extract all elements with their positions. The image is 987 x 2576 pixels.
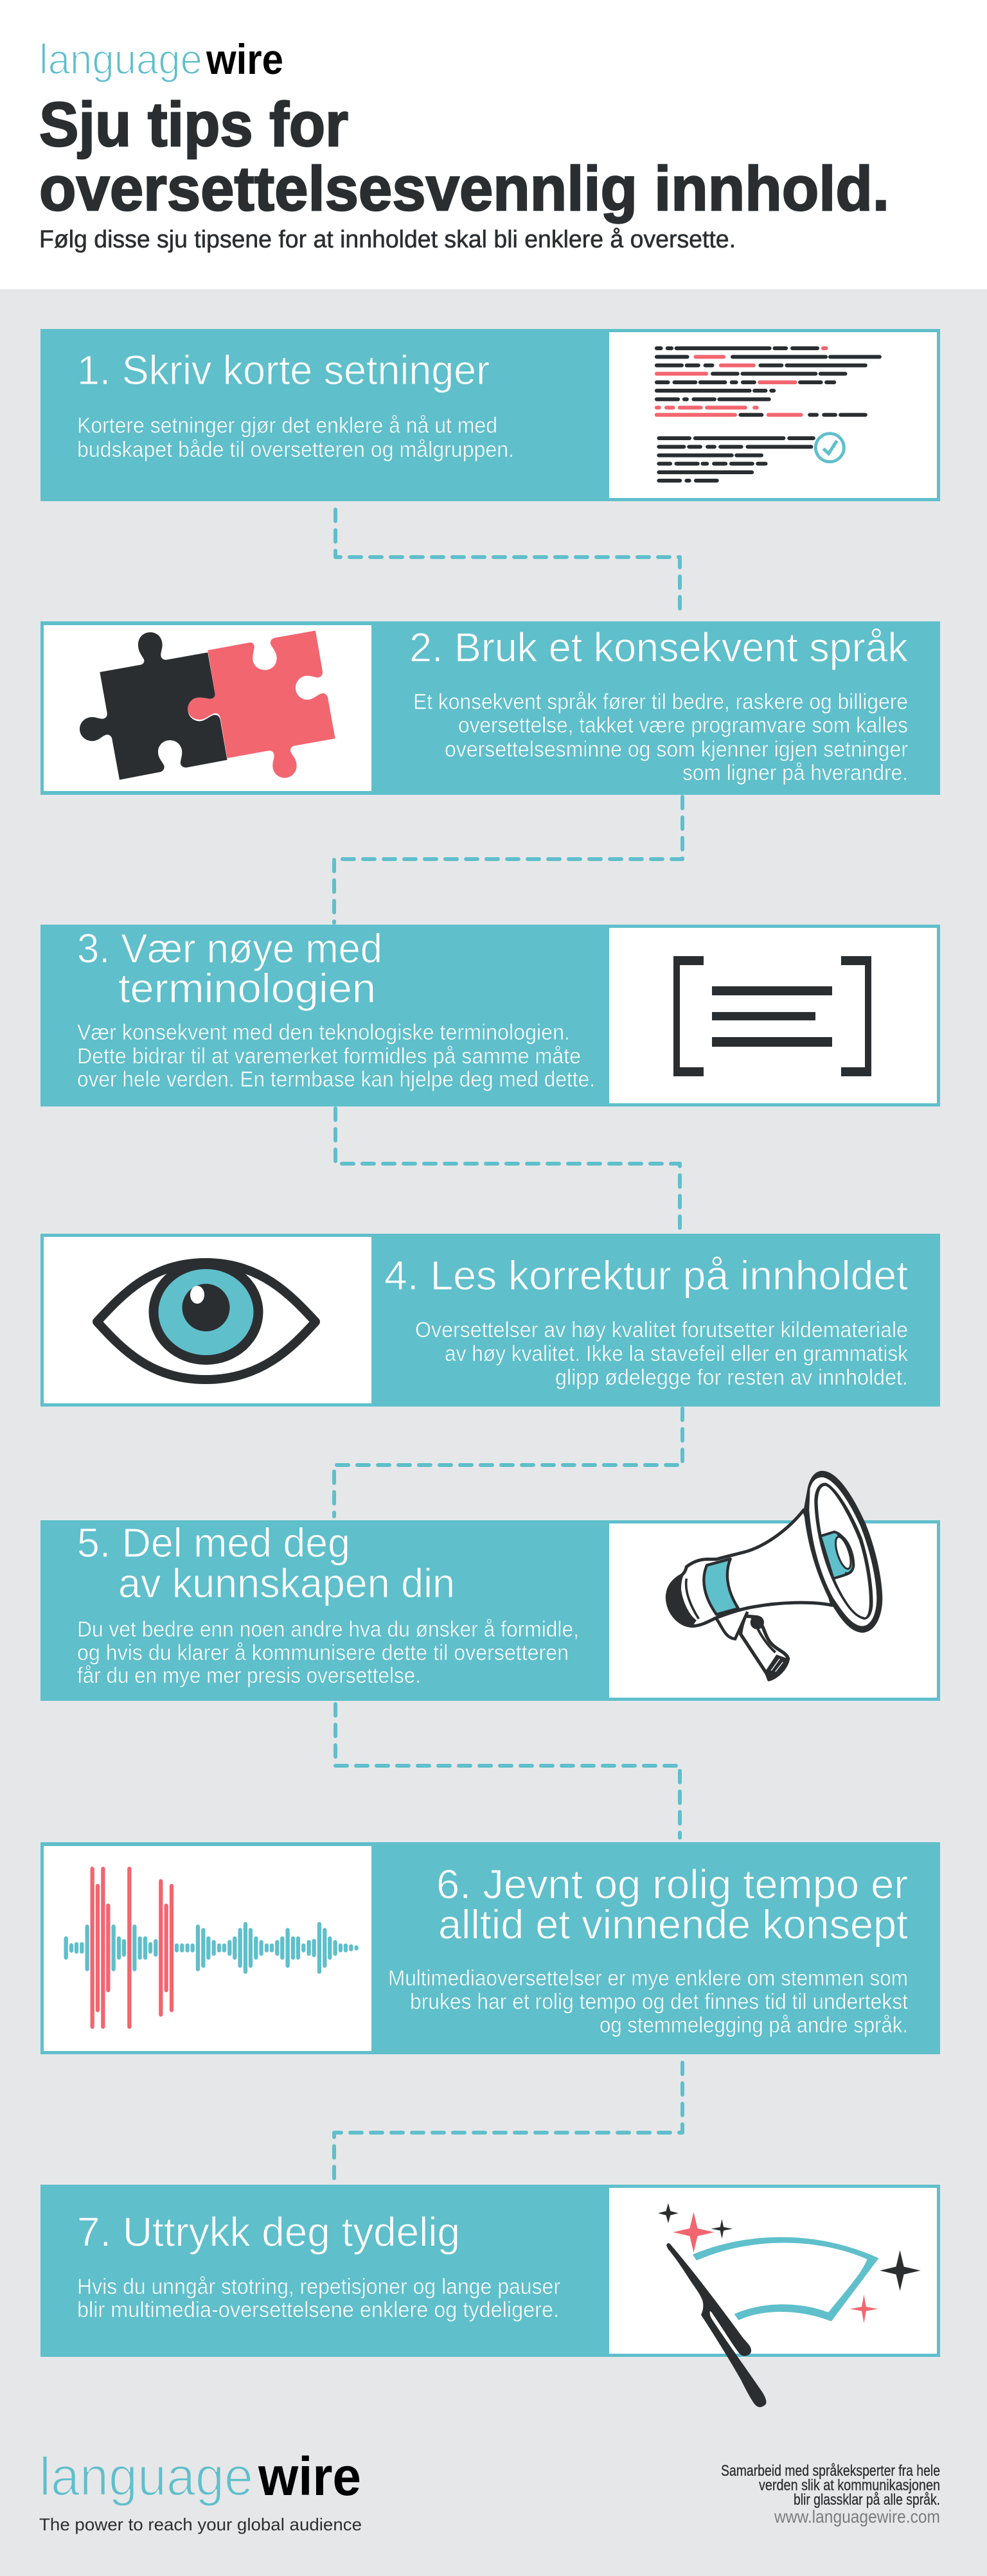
title: Sju tips for — [39, 89, 348, 159]
heading: tip 3: terminologien — [118, 965, 376, 1011]
text: tip 4 body: glipp ødelegge for resten av innholdet. — [555, 1365, 908, 1390]
text: tip 1 body — [77, 414, 514, 462]
arrow: connector 1 to 2 — [335, 510, 680, 617]
text: footer note — [721, 2462, 940, 2509]
heading: tip 2: 2. Bruk et konsekvent språk — [409, 625, 909, 671]
text: footer note: Samarbeid med språkeksperter fra hele — [721, 2462, 940, 2480]
heading: tip 6: 6. Jevnt og rolig tempo er — [436, 1861, 908, 1907]
text: tip 5 body: får du en mye mer presis oversettelse. — [77, 1664, 421, 1688]
footer — [39, 2446, 940, 2534]
panel: tip 6 — [40, 1842, 940, 2054]
header — [39, 35, 889, 253]
text: tip 2 body: oversettelsesminne og som kjenner igjen setninger — [445, 738, 908, 762]
title: oversettelsesvennlig innhold. — [39, 154, 889, 224]
text: tip 5 body — [77, 1617, 579, 1688]
text: tip 1 body: Kortere setninger gjør det enklere å nå ut med — [77, 414, 497, 438]
heading: tip 3 — [77, 925, 382, 1011]
text: tip 2 body: oversettelse, takket være programvare som kalles — [458, 713, 908, 738]
icon: puzzle pieces — [80, 630, 335, 780]
heading: tip 6: alltid et vinnende konsept — [438, 1901, 908, 1948]
text: tip 7 body: Hvis du unngår stotring, repetisjoner og lange pauser — [77, 2275, 560, 2299]
tagline: The power to reach your global audience — [39, 2515, 362, 2534]
text: tip 3 body — [77, 1020, 595, 1092]
icon: text lines with check mark — [657, 348, 880, 481]
heading: tip 4: 4. Les korrektur på innholdet — [384, 1252, 908, 1299]
text: tip 6 body — [388, 1966, 909, 2038]
text: tip 7 body — [77, 2275, 560, 2322]
text: tip 6 body: Multimediaoversettelser er mye enklere om stemmen som — [388, 1966, 908, 1991]
subtitle: Følg disse sju tipsene for at innholdet skal bli enklere å oversette. — [39, 226, 736, 253]
arrow: connector 5 to 6 — [335, 1704, 680, 1838]
panel: tip 3 — [40, 925, 940, 1106]
text: tip 7 body: blir multimedia-oversettelsene enklere og tydeligere. — [77, 2298, 559, 2322]
heading: tip 1: 1. Skriv korte setninger — [77, 347, 490, 393]
text: tip 4 body: av høy kvalitet. Ikke la stavefeil eller en grammatisk — [445, 1342, 909, 1366]
text: tip 3 body: Dette bidrar til at varemerket formidles på samme måte — [77, 1044, 581, 1069]
heading: tip 5 — [77, 1520, 455, 1606]
text: tip 2 body — [413, 690, 908, 785]
text: footer note: verden slik at kommunikasjonen — [759, 2476, 940, 2494]
text: tip 5 body: Du vet bedre enn noen andre hva du ønsker å formidle, — [77, 1617, 579, 1642]
text: tip 2 body: som ligner på hverandre. — [682, 761, 908, 785]
logo: footer: wire — [258, 2446, 361, 2507]
arrow: connector 4 to 5 — [334, 1408, 682, 1516]
panel: tip 7 — [40, 2185, 940, 2407]
heading: tip 6 — [436, 1861, 908, 1948]
panel: tip 2 — [40, 621, 940, 795]
text: footer note: blir glassklar på alle språk. — [794, 2491, 940, 2509]
text: tip 3 body: over hele verden. En termbase kan hjelpe deg med dette. — [77, 1067, 595, 1092]
text: tip 3 body: Vær konsekvent med den teknologiske terminologien. — [77, 1020, 570, 1045]
logo: wire — [206, 35, 283, 83]
text: tip 6 body: brukes har et rolig tempo og det finnes tid til undertekst — [410, 1989, 909, 2014]
heading: tip 3: 3. Vær nøye med — [77, 925, 382, 972]
text: tip 5 body: og hvis du klarer å kommunisere dette til oversetteren — [77, 1641, 569, 1666]
logo: footer: language — [39, 2446, 253, 2507]
heading: tip 7: 7. Uttrykk deg tydelig — [77, 2209, 460, 2255]
icon: brackets with lines — [673, 956, 871, 1076]
panel: tip 5 — [40, 1471, 940, 1701]
text: tip 4 body — [415, 1318, 909, 1390]
heading: tip 5: av kunnskapen din — [118, 1560, 455, 1606]
title — [39, 89, 889, 224]
arrow: connector 2 to 3 — [334, 797, 682, 923]
url: www.languagewire.com — [774, 2507, 940, 2527]
text: tip 1 body: budskapet både til oversetteren og målgruppen. — [77, 438, 514, 462]
icon: megaphone — [667, 1471, 882, 1680]
text: tip 4 body: Oversettelser av høy kvalitet forutsetter kildemateriale — [415, 1318, 908, 1342]
text: tip 2 body: Et konsekvent språk fører til bedre, raskere og billigere — [413, 690, 908, 715]
arrow: connector 3 to 4 — [335, 1108, 680, 1232]
icon: audio waveform — [66, 1869, 357, 2027]
logo: language — [39, 35, 202, 83]
panel: tip 4 — [40, 1234, 940, 1407]
logo: footer — [39, 2446, 361, 2507]
icon: windscreen wiper with sparkles — [658, 2203, 921, 2407]
arrow: connector 6 to 7 — [334, 2063, 682, 2182]
text: tip 6 body: og stemmelegging på andre språk. — [600, 2013, 908, 2038]
panel: tip 1 — [40, 329, 940, 501]
icon: eye — [97, 1259, 316, 1380]
heading: tip 5: 5. Del med deg — [77, 1520, 350, 1566]
